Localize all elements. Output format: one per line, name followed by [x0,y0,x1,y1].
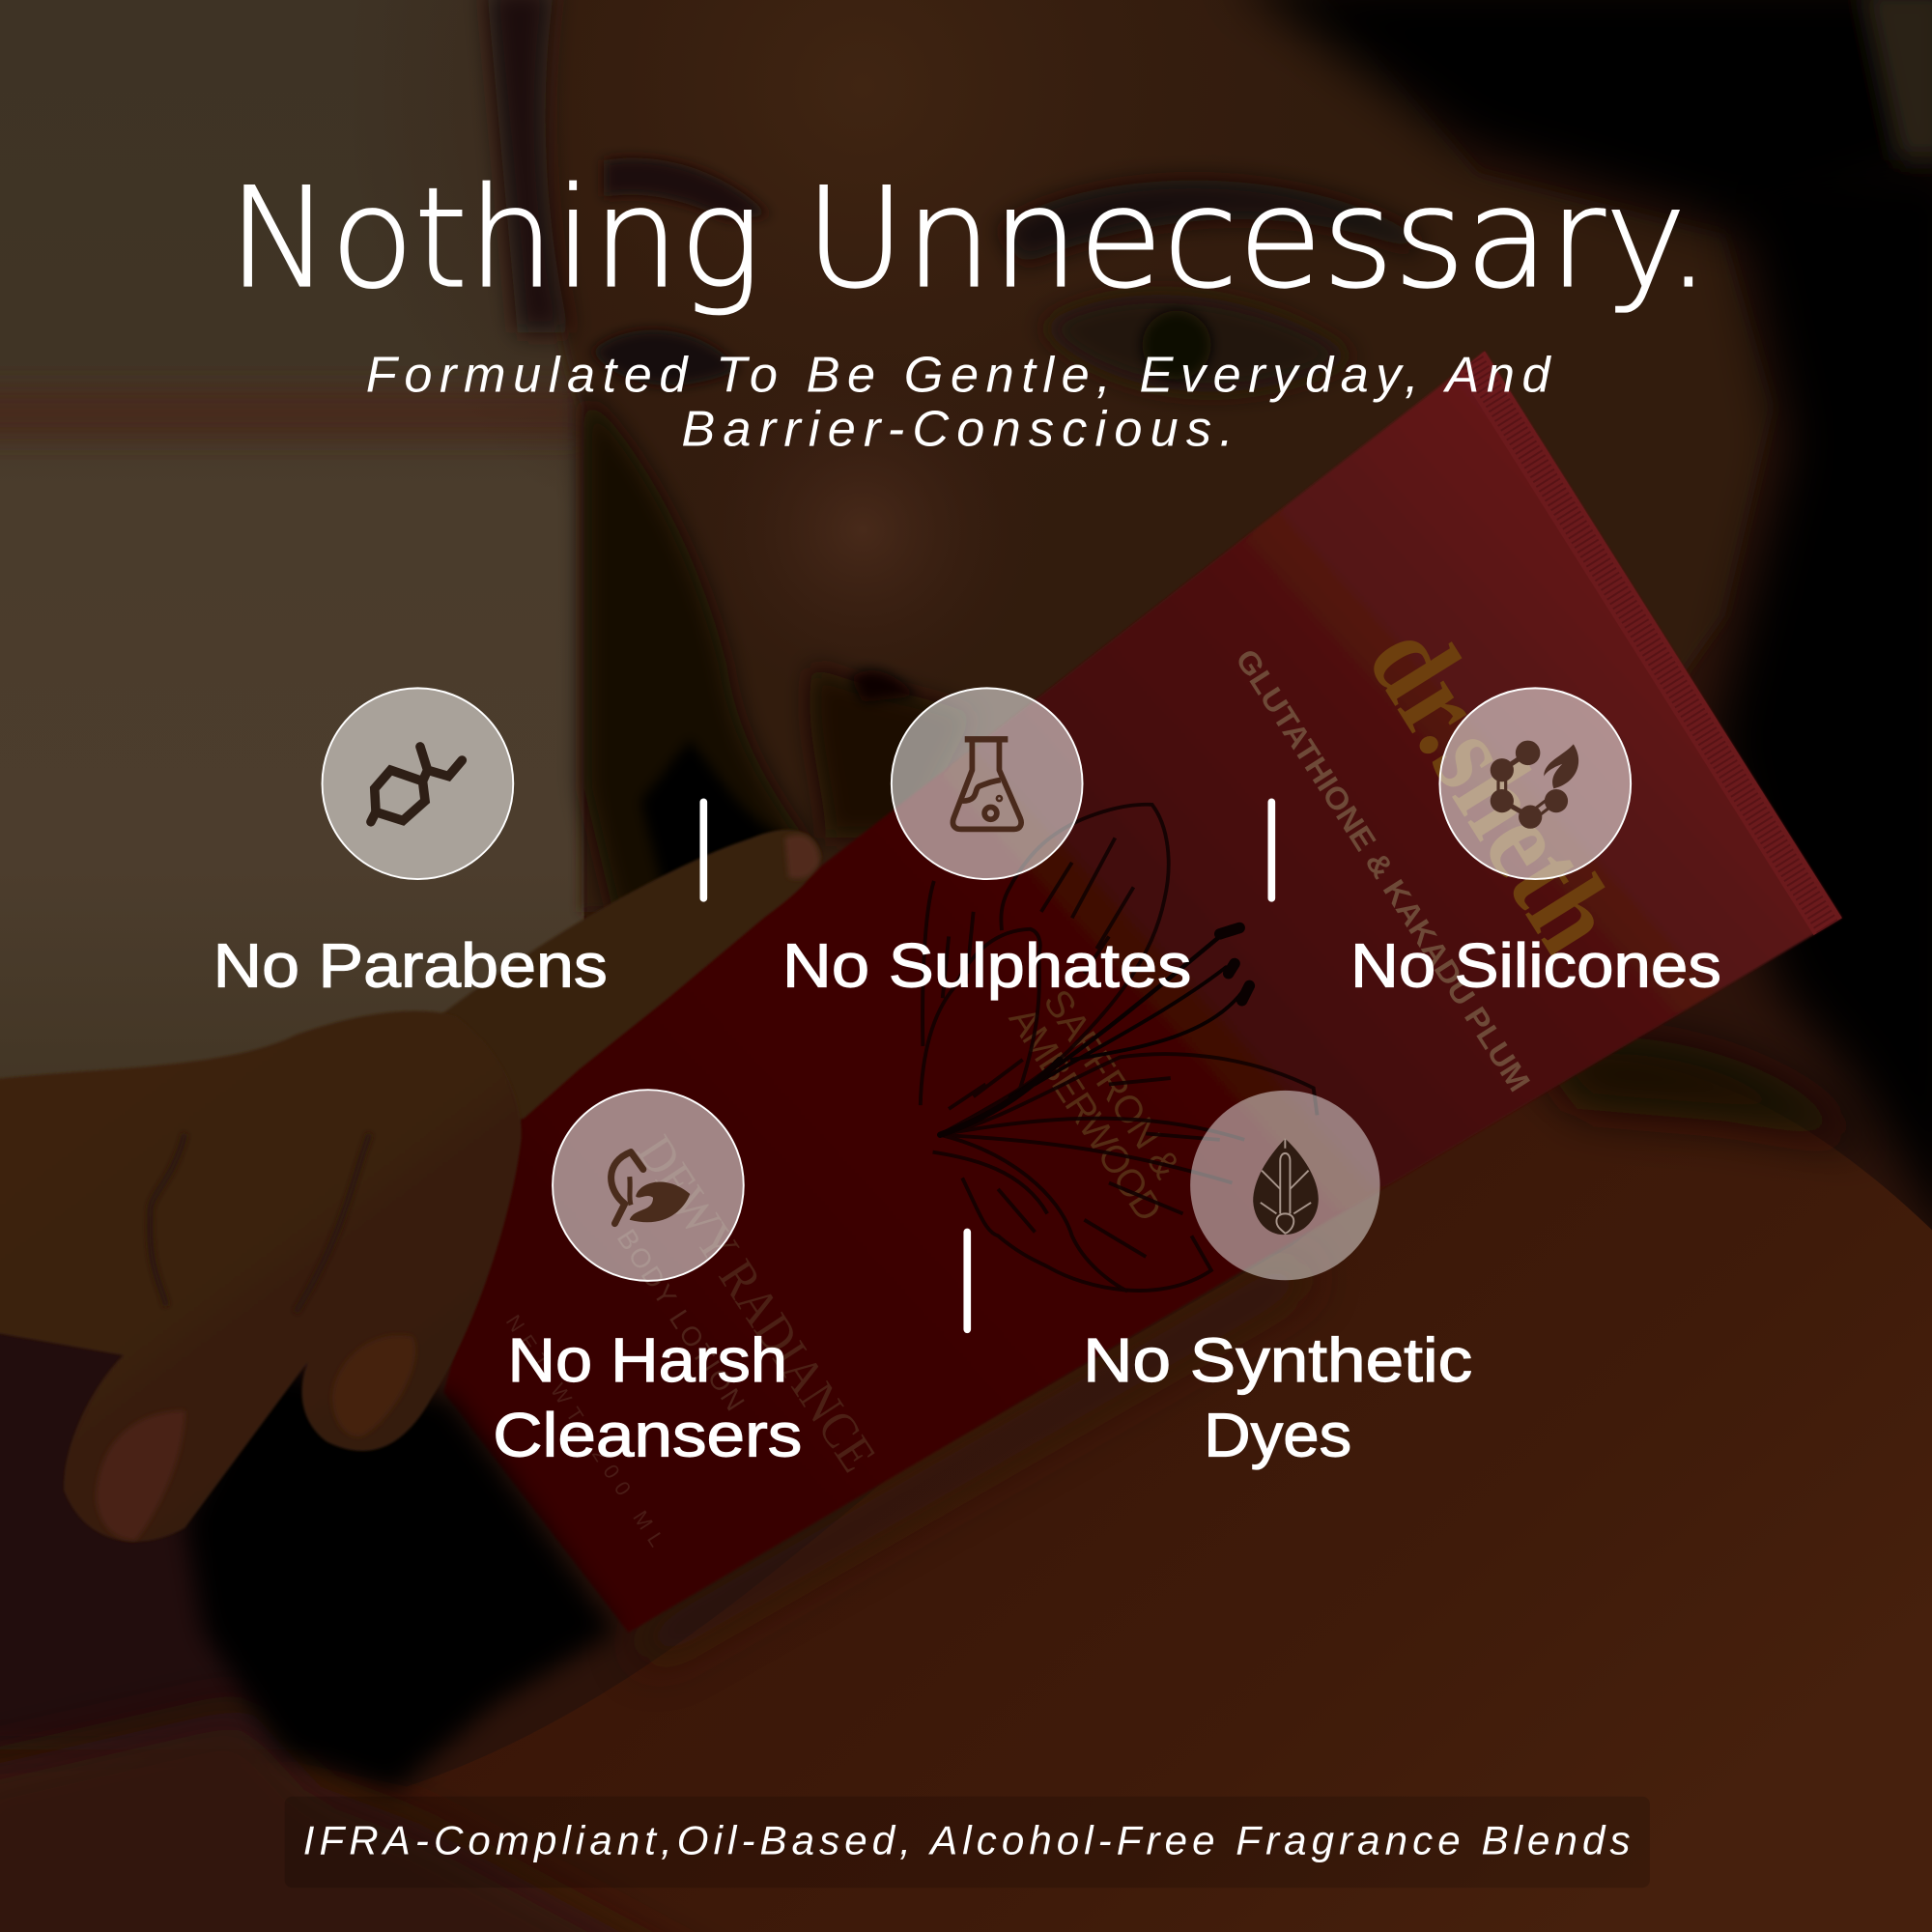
nails [332,1335,415,1436]
subtitle: Formulated To Be Gentle, Everyday, And [366,348,1552,404]
divider [699,799,707,902]
item: no sulphates [782,688,1191,1001]
index finger [431,830,822,1122]
lower left shadow and forearm [0,1306,739,1932]
icon: leaf with brush [1190,1091,1380,1280]
icon: leaves [553,1090,744,1281]
title: Nothing Unnecessary. [228,157,1710,319]
wall [0,0,584,1109]
product tube [185,352,1842,1792]
item: no harsh cleansers [493,1090,802,1470]
icon: molecule [323,688,513,879]
tube cap [185,1367,616,1792]
footer note: IFRA-Compliant,Oil-Based, Alcohol-Free Fragrance Blends [303,1818,1631,1863]
brows and eyes [604,157,770,219]
tube lettering: dr.sheth [1343,603,1643,975]
label: No Parabens [213,931,608,1001]
hand [0,830,822,1542]
label [1083,1325,1472,1470]
label: Dyes [1204,1401,1351,1470]
item: no parabens [213,688,608,1001]
divider [963,1229,971,1333]
flower illustration [921,805,1318,1292]
icon: silicone molecule with leaf [1439,688,1631,879]
label [493,1325,802,1470]
divider [1267,799,1275,902]
product tube: SAFFRON & [1036,982,1188,1186]
product tube: NET WT. 200 ML [501,1310,669,1550]
shoulder and arm [0,1058,1932,1932]
saffron stamens [940,927,1249,1135]
subtitle [366,348,1552,458]
icon: flask [892,688,1083,879]
label: No Sulphates [782,931,1191,1001]
hair [1233,0,1932,234]
palm and fingers [0,1010,522,1542]
subtitle: Barrier-Conscious. [681,402,1234,458]
label: No Synthetic [1083,1325,1472,1395]
item: no silicones [1350,688,1721,1001]
label: Cleansers [493,1401,802,1470]
product tube: GLUTATHIONE & KAKADU PLUM [1229,642,1537,1097]
face [345,0,1932,1282]
product tube: DEWY RADIANCE [626,1125,888,1482]
footer note [285,1797,1650,1888]
item: no synthetic dyes [1083,1091,1472,1470]
label: No Harsh [508,1325,787,1395]
finger creases [150,1133,370,1312]
product tube: AMBERWOOD [1001,1000,1171,1229]
product tube: BODY LOTION [611,1224,751,1416]
label: No Silicones [1350,931,1721,1001]
